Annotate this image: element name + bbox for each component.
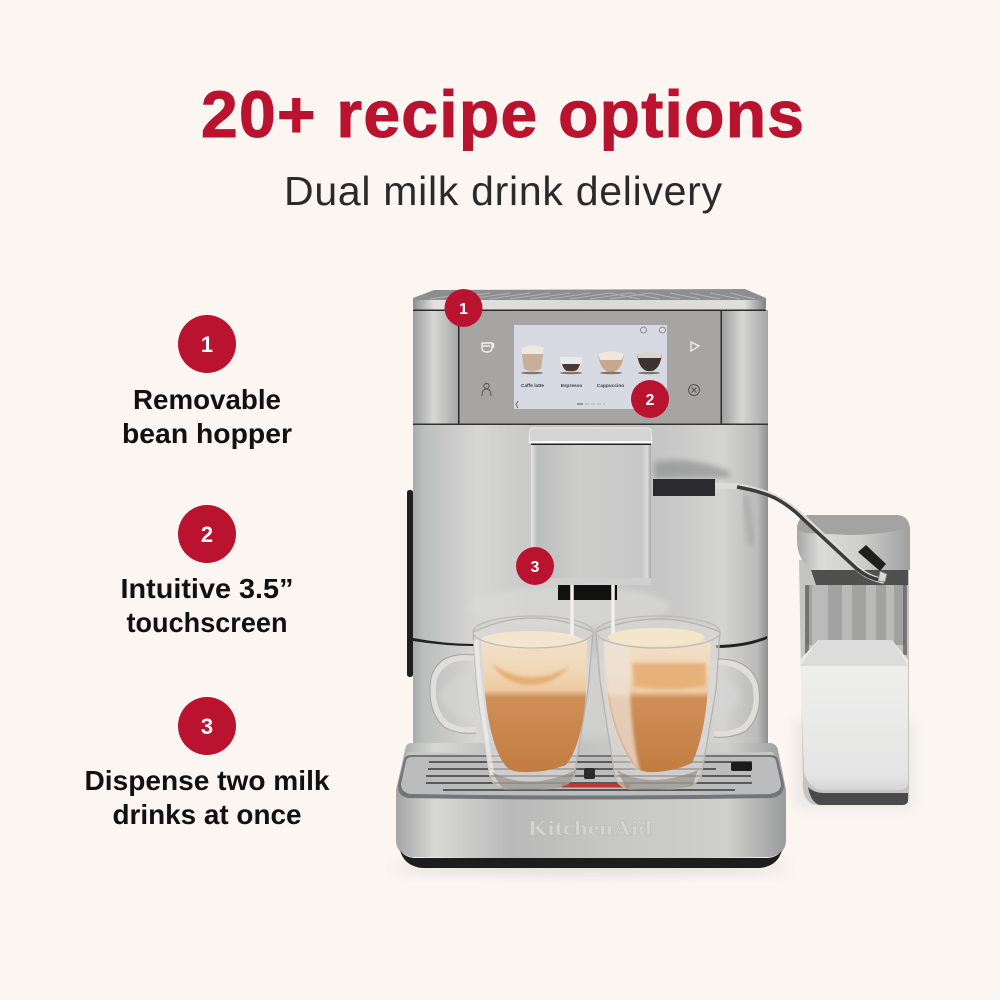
badge 3: [178, 697, 236, 755]
floor shadow: [390, 861, 790, 875]
label 1: bean hopper: [122, 418, 292, 449]
callout 3: [516, 547, 554, 585]
milk: [800, 640, 908, 790]
coffee: [481, 631, 587, 772]
dispenser: [529, 428, 652, 600]
panel icons: [482, 342, 700, 396]
milk streams: [572, 585, 613, 636]
glass: [596, 619, 720, 789]
badge 3: 3: [201, 714, 213, 739]
rim: [596, 616, 720, 648]
jug lid: [797, 515, 910, 570]
badge 1: [178, 315, 236, 373]
coffee: [604, 633, 711, 772]
jug container: [799, 560, 909, 805]
left cup: [430, 616, 593, 790]
drink: espresso: [560, 357, 582, 374]
feature 1: removable bean hopper: [122, 315, 292, 449]
label 2: touchscreen: [126, 607, 288, 638]
callout 2: 2: [646, 392, 655, 409]
milk jug: [795, 515, 913, 808]
subtitle: Dual milk drink delivery: [284, 168, 722, 214]
milk tube: [715, 486, 887, 582]
icon: play: [691, 342, 699, 351]
icon: person: [482, 383, 491, 396]
screen labels: Espresso: [561, 383, 582, 389]
screen labels: Caffe latte: [521, 383, 544, 389]
drink: caffe latte: [521, 346, 544, 374]
touchscreen: [514, 325, 667, 409]
spout: [558, 585, 617, 600]
right cup: [596, 616, 760, 790]
clip: [858, 545, 886, 571]
steam wand slot: [653, 479, 715, 496]
jug base: [808, 787, 908, 805]
badge 1: 1: [201, 332, 213, 357]
badge 2: [178, 505, 236, 563]
control head: [413, 310, 768, 425]
coffee machine: [390, 289, 790, 875]
handle: [433, 657, 476, 730]
label 3: Dispense two milk: [84, 765, 330, 796]
callout 1: [444, 289, 482, 327]
label 3: drinks at once: [112, 799, 302, 830]
callout 1: 1: [459, 301, 468, 318]
glass: [473, 618, 593, 789]
machine body: [413, 424, 768, 754]
cup-stand indicator: [584, 768, 595, 779]
feature 2: touchscreen: [120, 505, 294, 638]
bean hopper lid: [413, 289, 766, 311]
handle: [714, 662, 757, 734]
tray slots: [426, 762, 752, 790]
icon: cancel: [688, 384, 700, 396]
logo: KitchenAid: [528, 816, 652, 840]
callout 2: [631, 380, 669, 418]
jug shadow: [795, 720, 913, 808]
title: 20+ recipe options: [201, 77, 804, 151]
screen labels: [521, 383, 624, 389]
screen labels: Cappuccino: [597, 383, 624, 389]
base and drip tray: [396, 743, 786, 868]
label 1: Removable: [133, 384, 281, 415]
drink: americano: [637, 352, 662, 374]
rim: [473, 616, 593, 648]
label 2: Intuitive 3.5”: [120, 573, 294, 604]
screen icons: [640, 327, 666, 333]
badge 2: 2: [201, 522, 213, 547]
jug collar: [811, 570, 908, 585]
pagination: [577, 403, 583, 405]
icon: cup: [482, 343, 494, 352]
drink: cappuccino: [598, 352, 624, 374]
callout 3: 3: [531, 559, 540, 576]
feature 3: two milk drinks: [84, 697, 330, 830]
rear water tank edge: [407, 490, 413, 677]
